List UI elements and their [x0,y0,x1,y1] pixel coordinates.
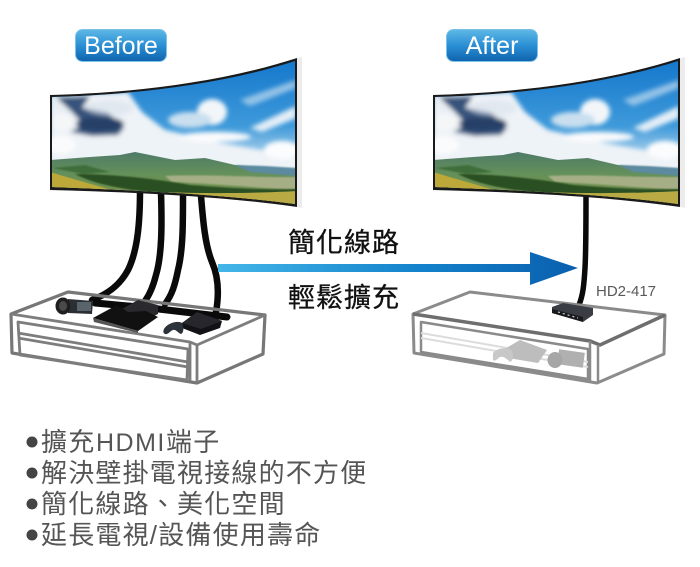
button: After: After [466,32,518,60]
button: After [446,30,538,62]
panel: after [413,30,685,383]
bullet 3: 簡化線路、美化空間 [41,489,286,519]
faded console [503,340,547,363]
devices: camcorder, HDMI boxes, game console and controller [56,298,222,335]
icon: lower HDMI box [93,305,158,333]
faded controller [493,348,513,362]
bullet 1 [26,427,220,457]
cable: single HDMI cable [579,196,586,305]
icon: upper HDMI box [122,300,158,322]
heading: simplified wiring: 簡化線路 [288,228,400,258]
icon: controller [163,322,183,334]
floor cable on cabinet [95,303,227,317]
bullet 2: 解決壁掛電視接線的不方便 [41,458,367,488]
bullet 1: HDMI [96,429,166,457]
bullet list [26,427,367,550]
heading: easy expansion: 輕鬆擴充 [288,283,400,313]
button: Before: Before [84,32,158,60]
cabinet: white media console [11,292,265,383]
arrow: before to after [218,252,578,285]
bullet 1: 擴充 [41,427,95,457]
device: HD2-417 HDMI switch [552,303,593,322]
model label: HD2-417 [596,283,656,300]
television: curved screen [44,55,302,210]
faded camcorder [548,349,585,368]
icon: camcorder [56,298,93,314]
bullet 1: 端子 [166,427,220,457]
panel: before [11,30,302,383]
icon: game console [182,312,222,335]
cabinet: white media console with faded devices [413,292,665,383]
bullet 4: 延長電視/設備使用壽命 [41,520,321,550]
television: curved screen [427,55,685,210]
cables: four HDMI cables to the TV [92,190,218,312]
